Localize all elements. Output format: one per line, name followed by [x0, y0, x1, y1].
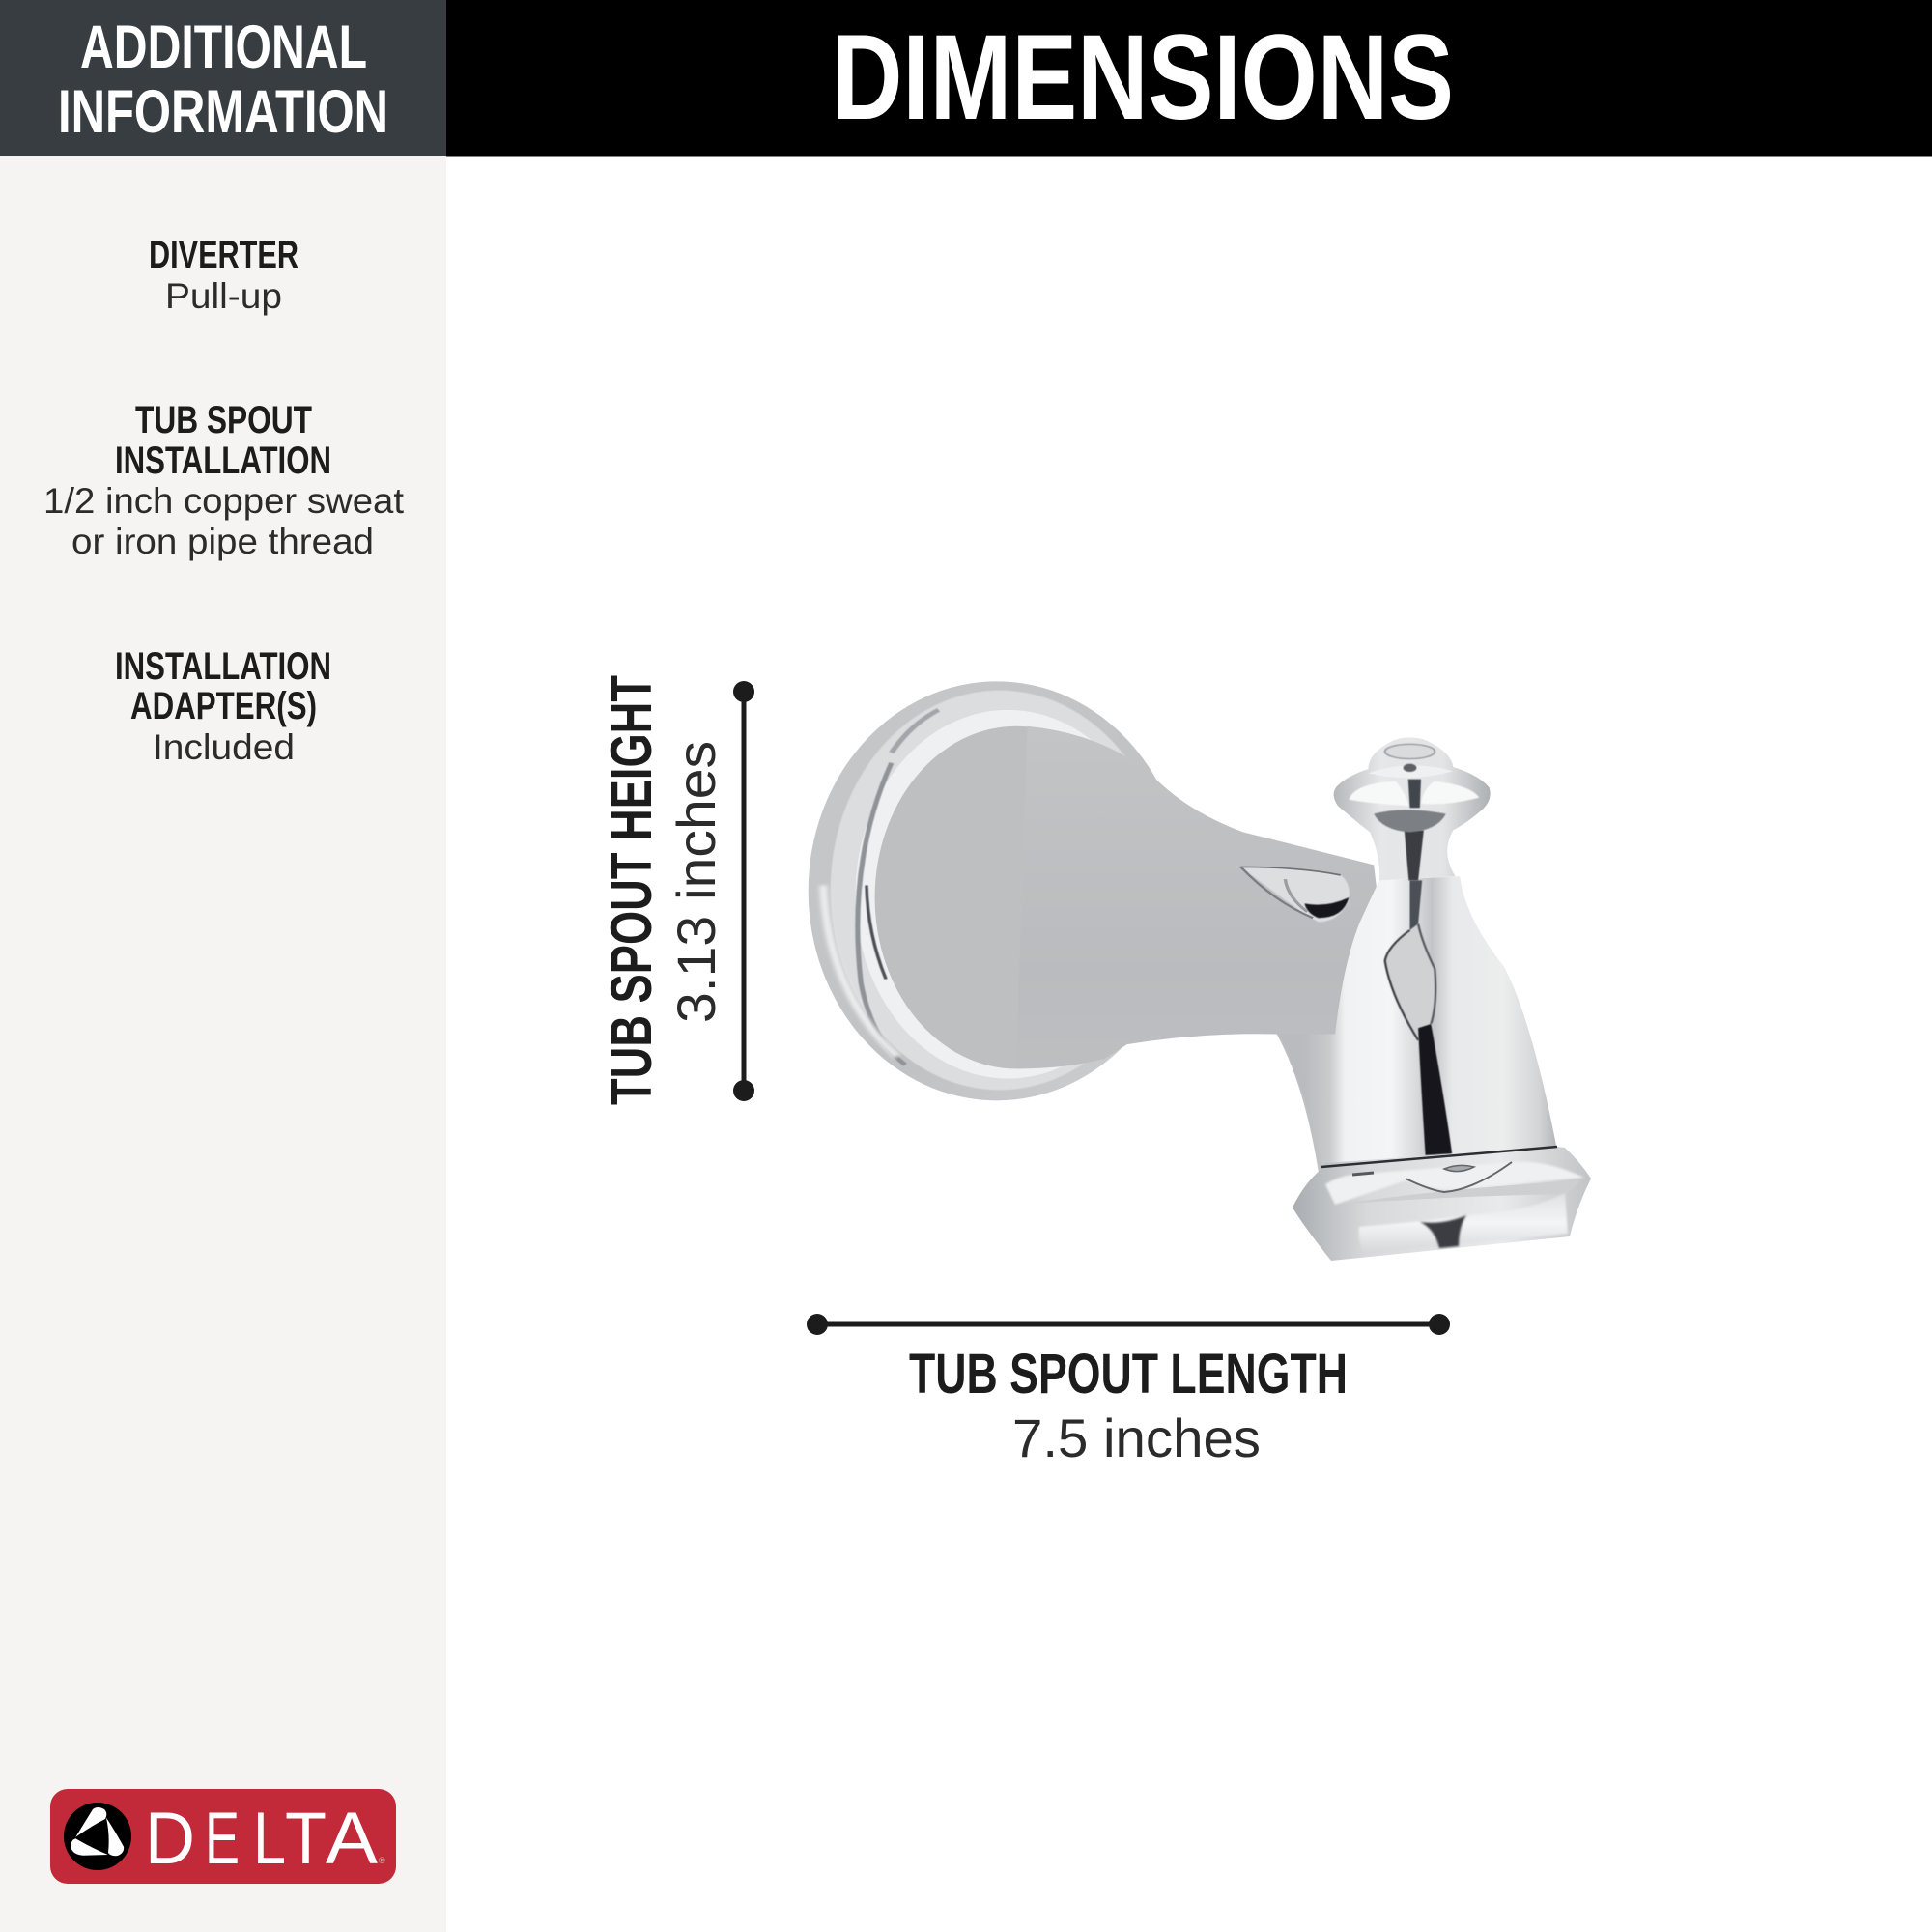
pull-up knob	[1334, 737, 1491, 880]
spec: diverter: Pull-up	[165, 276, 282, 316]
spec: installation adapters: Included	[153, 727, 295, 767]
dimension: height	[599, 675, 754, 1105]
header: additional information: INFORMATION	[58, 78, 388, 146]
header: additional information: ADDITIONAL	[80, 14, 367, 81]
spec: tub spout installation	[43, 399, 405, 561]
header: dimensions title	[446, 0, 1932, 156]
dimension: height: TUB SPOUT HEIGHT	[599, 675, 664, 1105]
spec: diverter: DIVERTER	[149, 234, 298, 276]
logo: delta: E	[205, 1798, 240, 1880]
spec: tub spout installation: or iron pipe thread	[71, 522, 374, 561]
spout body	[1016, 726, 1388, 1172]
nozzle reflection	[1385, 880, 1452, 1155]
dimension: height: 3.13 inches	[666, 741, 726, 1023]
image: chrome tub spout	[809, 681, 1591, 1261]
logo: delta: ®	[379, 1856, 385, 1865]
logo: delta	[50, 1789, 396, 1884]
spout collar	[1293, 1147, 1591, 1261]
logo: delta: A	[326, 1798, 378, 1880]
logo: delta: T	[285, 1798, 327, 1880]
spec: tub spout installation: INSTALLATION	[115, 440, 331, 482]
spout nozzle	[1280, 876, 1557, 1168]
spec: diverter	[149, 234, 298, 316]
spec: installation adapters	[115, 645, 331, 767]
logo: delta: D	[145, 1798, 195, 1880]
dimension: length: TUB SPOUT LENGTH	[909, 1343, 1348, 1406]
body highlight	[1240, 867, 1350, 922]
dimension: length: 7.5 inches	[1012, 1407, 1261, 1468]
spec: tub spout installation: TUB SPOUT	[135, 399, 312, 441]
header: dimensions title: DIMENSIONS	[832, 11, 1454, 145]
spec: installation adapters: ADAPTER(S)	[130, 685, 317, 727]
logo: delta: L	[253, 1798, 286, 1880]
spec: tub spout installation: 1/2 inch copper sweat	[43, 481, 405, 521]
dimension: length	[807, 1314, 1450, 1468]
header: additional information	[0, 0, 446, 156]
panel: sidebar details	[0, 156, 446, 1932]
mounting plate	[809, 681, 1185, 1100]
spec: installation adapters: INSTALLATION	[115, 645, 331, 688]
